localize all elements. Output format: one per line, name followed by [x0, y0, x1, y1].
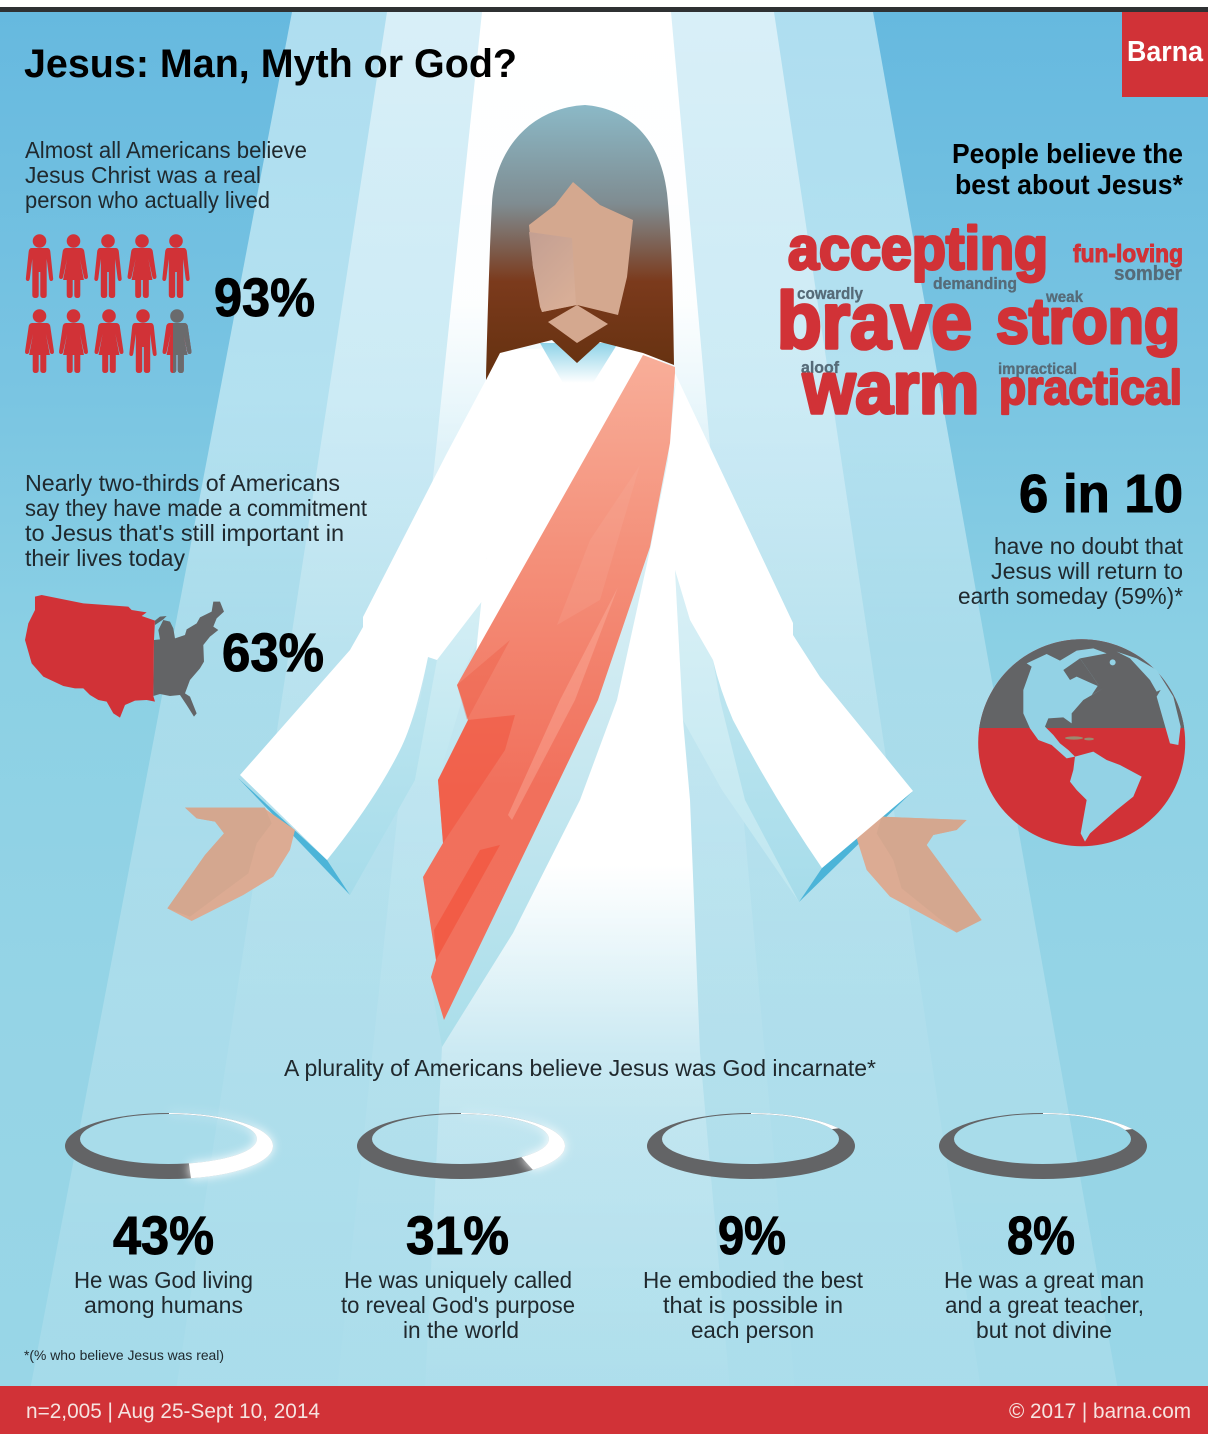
footer bar	[0, 1386, 1208, 1434]
figure of Jesus	[167, 105, 982, 1390]
stat column: 8%: 8%	[1007, 1206, 1075, 1266]
stat: 6 in 10: 6 in 10	[1019, 464, 1183, 524]
stat column: 8%: but not divine	[976, 1317, 1112, 1343]
text block: real person stat: Jesus Christ was a real	[25, 162, 261, 188]
word cloud: strong	[996, 285, 1180, 357]
icon: left hand	[167, 808, 295, 921]
word cloud: weak	[1045, 289, 1083, 306]
text block: real person stat: Almost all Americans believe	[25, 137, 307, 163]
text block: return to earth: have no doubt that	[994, 533, 1184, 559]
stat column: 31%: in the world	[403, 1317, 519, 1343]
word cloud: fun-loving	[1073, 240, 1183, 268]
stat column: 8%: and a great teacher,	[945, 1292, 1144, 1318]
text block: commitment stat: their lives today	[25, 545, 185, 571]
text block: commitment stat: to Jesus that's still important in	[25, 520, 344, 546]
right sleeve	[675, 373, 913, 868]
word cloud: aloof	[801, 358, 839, 377]
word cloud: warm	[802, 348, 979, 429]
stat column: 31%	[341, 1206, 575, 1343]
stat: 93%: 93%	[214, 268, 315, 328]
ring chart: 8%	[939, 1113, 1147, 1179]
stat column: 9%: 9%	[718, 1206, 786, 1266]
word cloud	[777, 215, 1183, 429]
stat: 63%: 63%	[222, 623, 324, 683]
Barna logo	[1122, 12, 1208, 97]
Barna logo: Barna	[1127, 36, 1204, 68]
text block: return to earth: earth someday (59%)*	[958, 583, 1183, 609]
left sleeve	[240, 378, 520, 860]
footer bar: © 2017 | barna.com	[1009, 1400, 1191, 1423]
text block: commitment stat: Nearly two-thirds of Americans	[25, 470, 340, 496]
footer bar: n=2,005 | Aug 25-Sept 10, 2014	[26, 1400, 320, 1423]
stat column: 9%: that is possible in	[663, 1292, 843, 1318]
word cloud: accepting	[788, 215, 1048, 282]
hair	[486, 105, 674, 380]
robe shadow under sleeves	[238, 557, 913, 902]
title: Jesus: Man, Myth or God?	[24, 42, 517, 86]
heading: people believe the best: People believe the	[952, 138, 1183, 169]
top rule	[0, 7, 1208, 12]
word cloud: brave	[777, 276, 972, 365]
stat column: 43%: He was God living	[74, 1267, 253, 1293]
icon: globe 59% red	[978, 639, 1185, 846]
stat column: 43%	[74, 1206, 253, 1318]
word cloud: somber	[1114, 263, 1182, 285]
sash shadow	[432, 380, 676, 1047]
stat column: 9%	[643, 1206, 864, 1343]
heading: people believe the best	[952, 138, 1183, 200]
stat column: 43%: among humans	[84, 1292, 243, 1318]
ring chart: 9%	[647, 1113, 855, 1179]
word cloud: cowardly	[797, 284, 863, 303]
stat column: 8%: He was a great man	[944, 1267, 1144, 1293]
text block: commitment stat: say they have made a commitment	[25, 495, 368, 521]
stat column: 31%: He was uniquely called	[344, 1267, 572, 1293]
stat column: 8%	[944, 1206, 1144, 1343]
ring chart: 43%	[65, 1113, 273, 1179]
heading: people believe the best: best about Jesus*	[955, 169, 1183, 200]
stat column: 31%: to reveal God's purpose	[341, 1292, 575, 1318]
text block: commitment stat	[25, 470, 368, 571]
stat column: 9%: each person	[691, 1317, 814, 1343]
ring chart: 31%	[357, 1113, 565, 1179]
stat column: 31%: 31%	[406, 1206, 509, 1266]
robe torso	[425, 345, 730, 1390]
footnote: *(% who believe Jesus was real)	[24, 1347, 224, 1363]
text block: return to earth	[958, 533, 1184, 609]
pictogram: 10 people, 93% red	[25, 234, 191, 373]
stat column: 9%: He embodied the best	[643, 1267, 864, 1293]
heading: plurality: A plurality of Americans believe Jesus was God incarnate*	[284, 1055, 876, 1081]
stat column: 43%: 43%	[113, 1206, 214, 1266]
text block: return to earth: Jesus will return to	[991, 558, 1183, 584]
face	[529, 182, 633, 343]
icon: right hand	[857, 817, 982, 933]
red sash	[423, 355, 675, 1020]
word cloud: demanding	[933, 274, 1017, 293]
text block: real person stat: person who actually lived	[25, 187, 270, 213]
icon: US map 63% red	[25, 595, 224, 718]
word cloud: practical	[999, 362, 1182, 415]
text block: real person stat	[25, 137, 307, 213]
word cloud: impractical	[998, 361, 1077, 378]
neck	[540, 343, 618, 383]
